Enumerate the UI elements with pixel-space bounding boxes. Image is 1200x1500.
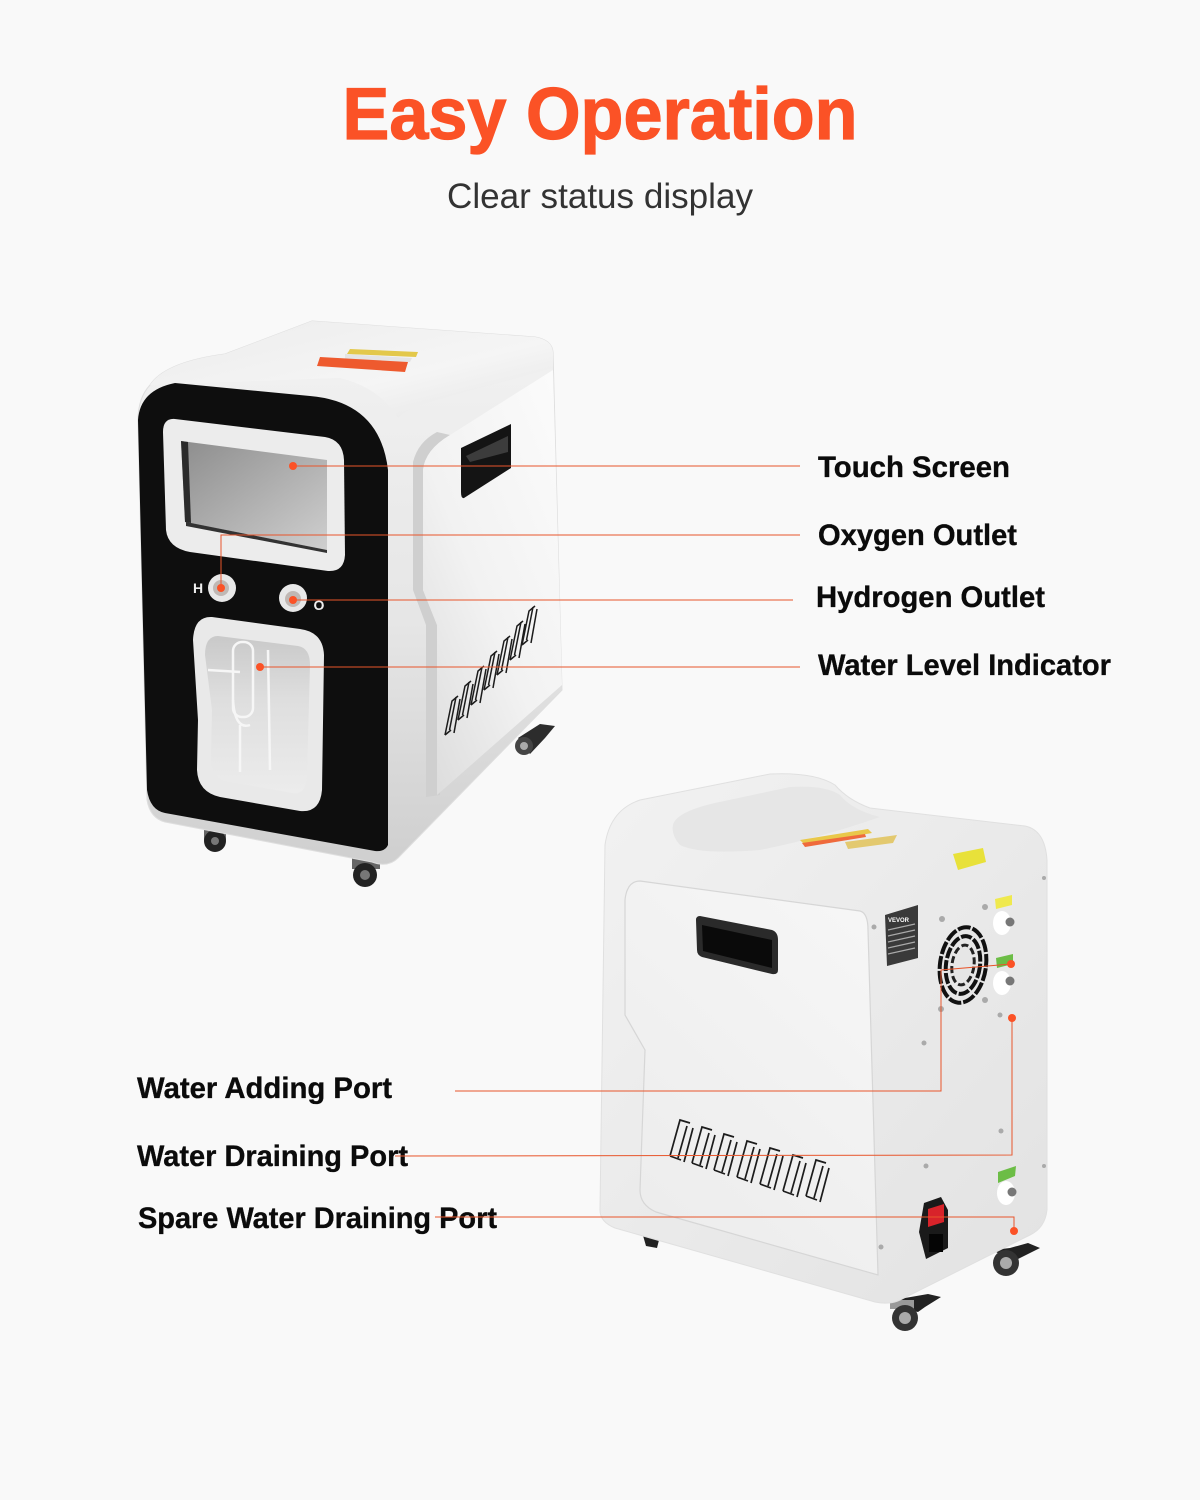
water tank window	[193, 617, 324, 811]
side handle	[461, 424, 511, 498]
port O: O	[314, 597, 325, 613]
touch screen	[181, 441, 327, 553]
label: Touch Screen: Touch Screen	[818, 451, 1010, 484]
port H	[193, 574, 236, 602]
subtitle: Clear status display	[447, 177, 753, 216]
leader line: Water Level Indicator	[256, 663, 800, 671]
label: Hydrogen Outlet: Hydrogen Outlet	[816, 581, 1045, 614]
touch screen frame	[163, 419, 345, 571]
side vents	[445, 606, 537, 735]
machine body	[138, 321, 562, 864]
top warning labels	[800, 829, 897, 849]
leader line: Touch Screen	[289, 462, 800, 470]
leader line: Oxygen Outlet	[217, 535, 800, 592]
label: Water Adding Port: Water Adding Port	[137, 1072, 392, 1105]
title: Easy Operation	[342, 74, 858, 155]
rating plate: VEVOR	[888, 918, 910, 924]
label: Water Level Indicator: Water Level Indicator	[818, 649, 1111, 682]
leader line: Hydrogen Outlet	[289, 596, 793, 604]
air outlet port	[993, 895, 1014, 935]
rating plate	[885, 905, 918, 966]
black front panel	[138, 383, 388, 851]
drain port	[997, 1166, 1016, 1205]
leader line: Spare Water Draining Port	[435, 1217, 1018, 1235]
cooling fan	[933, 922, 993, 1008]
top recess	[673, 787, 880, 852]
label: Water Draining Port: Water Draining Port	[137, 1140, 408, 1173]
port O	[279, 584, 325, 613]
port H: H	[193, 580, 203, 596]
leader line: Water Draining Port	[395, 1014, 1016, 1156]
screws	[872, 876, 1046, 1250]
side door panel	[423, 370, 562, 795]
door vents	[670, 1120, 829, 1202]
rear door panel	[625, 881, 878, 1275]
wheels front	[204, 724, 555, 887]
side door groove	[413, 432, 450, 797]
power socket	[919, 1197, 948, 1259]
label: Oxygen Outlet: Oxygen Outlet	[818, 519, 1017, 552]
label: Spare Water Draining Port: Spare Water Draining Port	[138, 1202, 497, 1235]
rear wheels	[642, 1232, 1040, 1331]
product photo: front view	[138, 321, 562, 887]
door handle	[696, 916, 778, 974]
warning labels	[317, 349, 418, 372]
yellow warning sticker	[953, 848, 986, 870]
water level tube	[208, 642, 270, 772]
water adding port	[993, 954, 1014, 995]
leader line: Water Adding Port	[455, 960, 1015, 1091]
top surface	[150, 321, 553, 418]
rear body	[600, 774, 1047, 1303]
product photo: rear view	[600, 774, 1047, 1331]
water tank	[205, 636, 310, 793]
